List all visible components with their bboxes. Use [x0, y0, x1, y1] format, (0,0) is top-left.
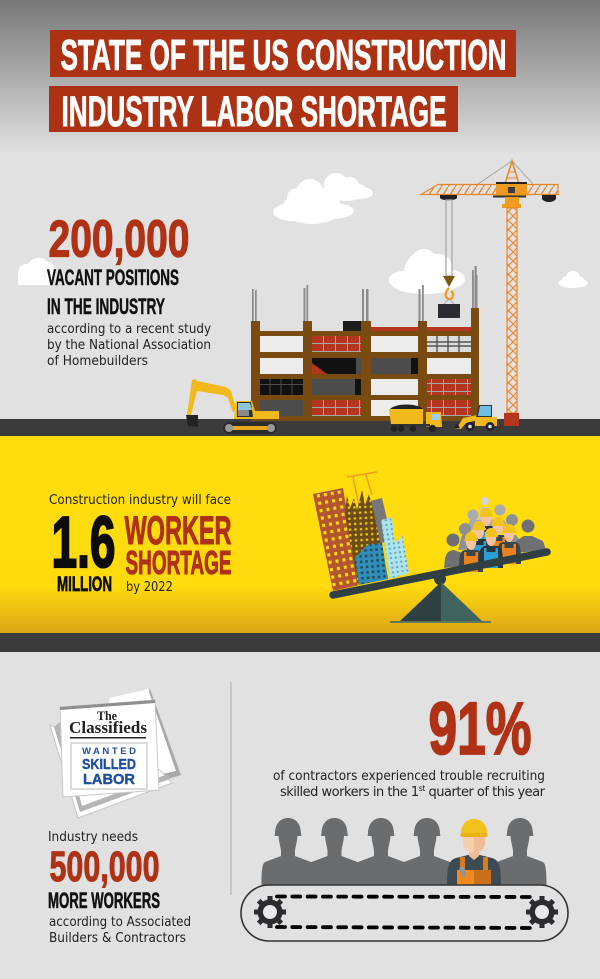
clouds	[18, 173, 588, 294]
stat: 500,000 more workers	[48, 830, 191, 946]
icon: worker in hard hat	[447, 819, 501, 885]
frame	[251, 308, 479, 421]
cabin	[496, 182, 527, 184]
newspaper: the classifieds: WANTED	[82, 746, 136, 757]
title	[49, 30, 516, 136]
stat: 1.6 million worker shortage: by 2022	[126, 580, 173, 595]
grey crowd	[444, 497, 546, 568]
newspaper: the classifieds: Classifieds	[69, 718, 147, 737]
stat: 200,000 vacant positions: VACANT POSITIONS	[47, 265, 179, 290]
rope and hook	[446, 200, 452, 276]
background: top gradient	[0, 0, 600, 156]
stat: 500,000 more workers: Industry needs	[48, 830, 138, 845]
icon: right gear	[526, 896, 558, 928]
cells	[260, 336, 303, 416]
stat: 200,000 vacant positions	[47, 210, 211, 369]
dark strip under yellow panel	[0, 633, 600, 652]
stat: 500,000 more workers: Builders & Contractors	[49, 931, 186, 946]
newspaper: the classifieds: The	[97, 708, 117, 723]
stat: 1.6 million worker shortage	[49, 493, 232, 596]
tower crane	[421, 161, 558, 426]
stat: 91% of contractors: quarter of this year	[425, 785, 546, 800]
stat: 91% of contractors: st	[419, 784, 425, 793]
stat: 1.6 million worker shortage: Construction industry will face	[49, 493, 231, 508]
plank	[333, 552, 547, 595]
background: yellow panel	[0, 436, 600, 633]
stat: 200,000 vacant positions: of Homebuilders	[47, 354, 148, 369]
pivot	[434, 573, 446, 585]
wheel loader	[454, 405, 497, 431]
newspaper: the classifieds: SKILLED	[82, 756, 136, 773]
balance scale: buildings versus workers	[313, 472, 547, 623]
stat: 1.6 million worker shortage: MILLION	[57, 573, 112, 596]
stat: 500,000 more workers: according to Associated	[49, 915, 191, 930]
stat: 200,000 vacant positions: by the National Association	[47, 338, 211, 353]
stat: 91% of contractors: skilled workers in the 1	[280, 785, 419, 800]
newspaper: the classifieds: LABOR	[83, 771, 135, 788]
stat: 200,000 vacant positions: according to a recent study	[47, 322, 211, 337]
background: sky panel	[0, 156, 600, 419]
conveyor belt	[241, 885, 568, 941]
newspaper: the classifieds	[50, 689, 181, 818]
stat: 1.6 million worker shortage: WORKER	[124, 509, 232, 553]
icon: left gear	[254, 896, 286, 928]
jib	[421, 184, 558, 194]
stat: 500,000 more workers: 500,000	[50, 843, 160, 891]
stat: 500,000 more workers: MORE WORKERS	[48, 888, 160, 913]
stat: 1.6 million worker shortage: 1.6	[52, 503, 116, 583]
road strip	[0, 419, 600, 436]
stat: 200,000 vacant positions: IN THE INDUSTRY	[47, 294, 165, 319]
tower	[507, 208, 517, 413]
stat: 200,000 vacant positions: 200,000	[48, 210, 190, 268]
dump truck	[389, 404, 442, 432]
counterweights	[440, 195, 457, 200]
stat: 91% of contractors: 91%	[428, 687, 532, 770]
building under construction	[251, 266, 479, 421]
workers on conveyor	[262, 818, 546, 885]
stat: 91% of contractors	[273, 687, 546, 800]
rebars	[252, 266, 478, 321]
excavator	[186, 379, 279, 434]
stat: 1.6 million worker shortage: SHORTAGE	[126, 544, 232, 581]
background: lower panel	[0, 652, 600, 979]
stat: 91% of contractors: of contractors experienced trouble recruiting	[273, 769, 545, 784]
workers	[459, 508, 521, 572]
buildings	[313, 472, 409, 591]
